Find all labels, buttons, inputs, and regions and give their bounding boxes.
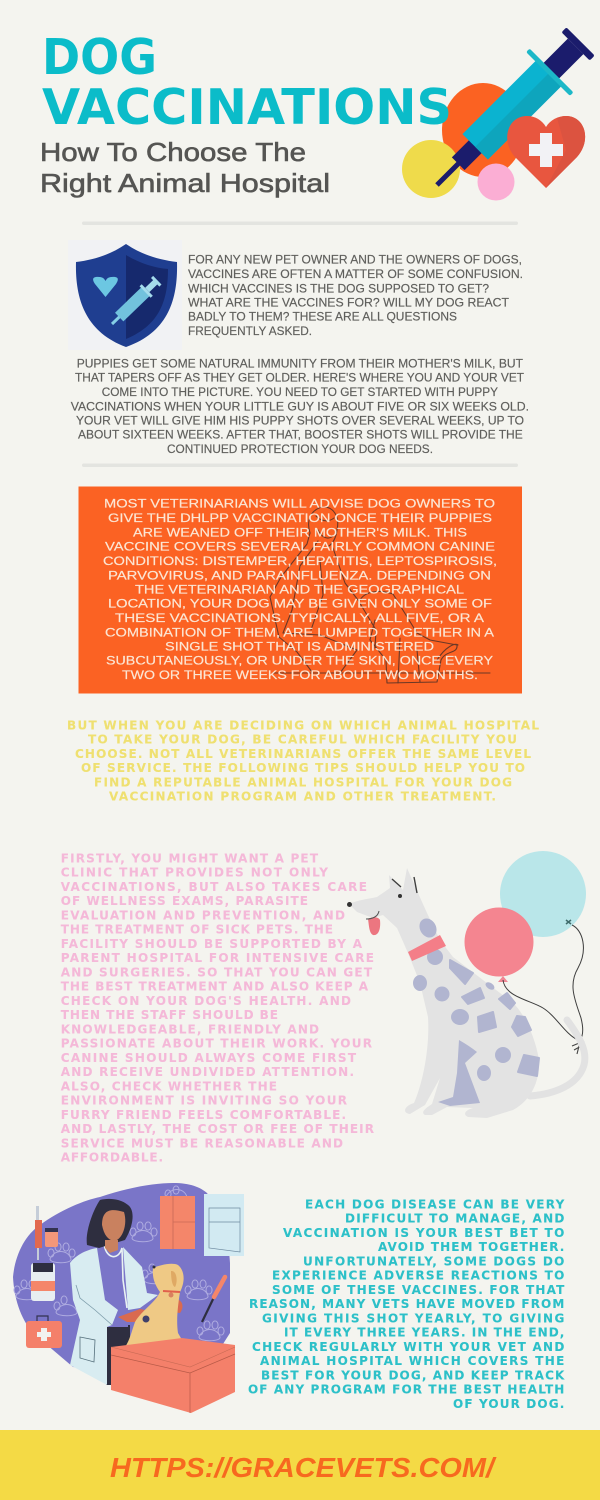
- text block: vaccination advice: SOME OF THESE VACCINES. FOR THAT: [272, 1283, 565, 1297]
- text block: choosing a facility: [67, 718, 539, 804]
- text block: pet clinic tips: ENVIRONMENT IS INVITING SO YOUR: [61, 1094, 347, 1108]
- text block: pet clinic tips: SERVICE MUST BE REASONABLE AND: [61, 1136, 343, 1150]
- vet in white coat: [70, 1199, 182, 1385]
- text block: choosing a facility: FIND A REPUTABLE ANIMAL HOSPITAL FOR YOUR DOG: [94, 775, 512, 789]
- text block: pet clinic tips: AND LASTLY, THE COST OR FEE OF THEIR: [61, 1122, 374, 1136]
- text block: new pet owner questions: WHAT ARE THE VACCINES FOR? WILL MY DOG REACT: [188, 296, 509, 310]
- text block: DHLPP vaccination copy: SINGLE SHOT THAT IS ADMINISTERED: [165, 639, 434, 653]
- text block: DHLPP vaccination copy: LOCATION, YOUR DOG MAY BE GIVEN ONLY SOME OF: [108, 597, 492, 611]
- text block: pet clinic tips: THE TREATMENT OF SICK PETS. THE: [61, 923, 333, 937]
- text block: pet clinic tips: PASSIONATE ABOUT THEIR WORK. YOUR: [61, 1037, 372, 1051]
- text block: DHLPP vaccination copy: VACCINE COVERS SEVERAL FAIRLY COMMON CANINE: [105, 540, 495, 554]
- text block: puppies immunity: ABOUT SIXTEEN WEEKS. AFTER THAT, BOOSTER SHOTS WILL PROVIDE THE: [78, 428, 523, 442]
- text block: DHLPP vaccination copy: MOST VETERINARIANS WILL ADVISE DOG OWNERS TO: [104, 497, 495, 511]
- text block: puppies immunity: PUPPIES GET SOME NATURAL IMMUNITY FROM THEIR MOTHER'S MILK, BUT: [77, 357, 523, 371]
- text block: vaccination advice: VACCINATION IS YOUR BEST BET TO: [283, 1226, 564, 1240]
- title: DOG: [42, 29, 157, 86]
- text block: puppies immunity: [71, 357, 529, 456]
- text block: new pet owner questions: BADLY TO THEM? THESE ARE ALL QUESTIONS: [188, 310, 457, 324]
- text block: DHLPP vaccination copy: THE VETERINARIAN AND THE GEOGRAPHICAL: [135, 582, 464, 596]
- text block: pet clinic tips: AND RECEIVE UNDIVIDED ATTENTION.: [61, 1065, 354, 1079]
- text block: pet clinic tips: THEN THE STAFF SHOULD BE: [61, 1008, 278, 1022]
- text block: vaccination advice: EXPERIENCE ADVERSE REACTIONS TO: [272, 1269, 564, 1283]
- text block: pet clinic tips: THE BEST TREATMENT AND ALSO KEEP A: [61, 980, 369, 994]
- illustration: vet examining a puppy: [13, 1183, 244, 1413]
- text block: vaccination advice: REASON, MANY VETS HAVE MOVED FROM: [249, 1297, 564, 1311]
- illustration: exam table: [111, 1338, 235, 1413]
- text block: pet clinic tips: [61, 851, 374, 1165]
- text block: choosing a facility: TO TAKE YOUR DOG, BE CAREFUL WHICH FACILITY YOU: [88, 733, 517, 747]
- text block: vaccination advice: IT EVERY THREE YEARS. IN THE END,: [284, 1326, 564, 1340]
- text block: pet clinic tips: CHECK ON YOUR DOG'S HEALTH. AND: [61, 994, 351, 1008]
- line art: person with dog: [270, 507, 490, 683]
- text block: DHLPP vaccination copy: CONDITIONS: DISTEMPER, HEPATITIS, LEPTOSPIROSIS,: [103, 554, 497, 568]
- text block: choosing a facility: OF SERVICE. THE FOLLOWING TIPS SHOULD HELP YOU TO: [81, 761, 525, 775]
- illustration: syringe with shapes and heart: [402, 20, 600, 207]
- text block: DHLPP vaccination copy: ARE WEANED OFF THEIR MOTHER'S MILK. THIS: [133, 525, 467, 539]
- text block: new pet owner questions: WHICH VACCINES IS THE DOG SUPPOSED TO GET?: [188, 281, 489, 295]
- text block: DHLPP vaccination copy: COMBINATION OF THEM, ARE LUMPED TOGETHER IN A: [105, 625, 495, 639]
- text block: puppies immunity: COME INTO THE PICTURE. YOU NEED TO GET STARTED WITH PUPPY: [102, 385, 498, 399]
- text block: vaccination advice: AVOID THEM TOGETHER.: [378, 1240, 564, 1254]
- text block: puppies immunity: THAT TAPERS OFF AS THEY GET OLDER. HERE'S WHERE YOU AND YOUR VET: [75, 371, 524, 385]
- text block: vaccination advice: DIFFICULT TO MANAGE, AND: [345, 1212, 564, 1226]
- text block: choosing a facility: VACCINATION PROGRAM AND OTHER TREATMENT.: [109, 790, 496, 804]
- text block: pet clinic tips: FIRSTLY, YOU MIGHT WANT A PET: [61, 851, 319, 865]
- panel: DHLPP vaccination: [78, 486, 522, 694]
- subtitle: Right Animal Hospital: [40, 168, 330, 198]
- text block: vaccination advice: GIVING THIS SHOT YEARLY, TO GIVING: [262, 1311, 564, 1325]
- text block: pet clinic tips: AFFORDABLE.: [61, 1151, 163, 1165]
- text block: DHLPP vaccination copy: GIVE THE DHLPP VACCINATION ONCE THEIR PUPPIES: [108, 511, 492, 525]
- text block: vaccination advice: CHECK REGULARLY WITH YOUR VET AND: [252, 1340, 564, 1354]
- subtitle: How To Choose The: [40, 137, 306, 167]
- text block: pet clinic tips: EVALUATION AND PREVENTION, AND: [61, 908, 345, 922]
- icon: window on wall: [160, 1196, 195, 1249]
- text block: pet clinic tips: CANINE SHOULD ALWAYS COME FIRST: [61, 1051, 357, 1065]
- title: VACCINATIONS: [42, 79, 452, 136]
- title: [42, 29, 452, 136]
- text block: vaccination advice: OF YOUR DOG.: [453, 1397, 564, 1411]
- subtitle: [40, 137, 330, 198]
- text block: DHLPP vaccination copy: [103, 497, 497, 682]
- text block: new pet owner questions: [188, 253, 523, 338]
- text block: new pet owner questions: VACCINES ARE OFTEN A MATTER OF SOME CONFUSION.: [188, 267, 523, 281]
- text block: vaccination advice: EACH DOG DISEASE CAN BE VERY: [305, 1197, 565, 1211]
- icon: shield with heart and syringe: [68, 240, 182, 350]
- text block: DHLPP vaccination copy: TWO OR THREE WEEKS FOR ABOUT TWO MONTHS.: [122, 668, 478, 682]
- text block: puppies immunity: YOUR VET WILL GIVE HIM HIS PUPPY SHOTS OVER SEVERAL WEEKS, UP TO: [76, 413, 524, 427]
- text block: vaccination advice: OF ANY PROGRAM FOR THE BEST HEALTH: [248, 1383, 564, 1397]
- text block: vaccination advice: UNFORTUNATELY, SOME DOGS DO: [303, 1254, 564, 1268]
- footer banner: [0, 1430, 600, 1500]
- text block: DHLPP vaccination copy: PARVOVIRUS, AND PARAINFLUENZA. DEPENDING ON: [108, 568, 491, 582]
- text block: vaccination advice: [248, 1197, 565, 1411]
- illustration: spotted dog with balloons: [347, 851, 586, 1118]
- text block: choosing a facility: BUT WHEN YOU ARE DECIDING ON WHICH ANIMAL HOSPITAL: [67, 718, 539, 732]
- text block: DHLPP vaccination copy: SUBCUTANEOUSLY, OR UNDER THE SKIN, ONCE EVERY: [106, 654, 493, 668]
- text block: pet clinic tips: AND SURGERIES. SO THAT YOU CAN GET: [61, 965, 373, 979]
- text block: pet clinic tips: OF WELLNESS EXAMS, PARASITE: [61, 894, 308, 908]
- text block: new pet owner questions: FOR ANY NEW PET OWNER AND THE OWNERS OF DOGS,: [188, 253, 522, 267]
- text block: DHLPP vaccination copy: THESE VACCINATIONS. TYPICALLY, ALL FIVE, OR A: [115, 611, 485, 625]
- text block: pet clinic tips: PARENT HOSPITAL FOR INTENSIVE CARE: [61, 951, 374, 965]
- text block: pet clinic tips: VACCINATIONS, BUT ALSO TAKES CARE: [61, 880, 367, 894]
- text block: choosing a facility: CHOOSE. NOT ALL VETERINARIANS OFFER THE SAME LEVEL: [75, 747, 531, 761]
- text block: vaccination advice: ANIMAL HOSPITAL WHICH COVERS THE: [260, 1354, 564, 1368]
- text block: puppies immunity: CONTINUED PROTECTION YOUR DOG NEEDS.: [167, 442, 433, 456]
- text block: pet clinic tips: KNOWLEDGEABLE, FRIENDLY AND: [61, 1022, 319, 1036]
- text block: vaccination advice: BEST FOR YOUR DOG, AND KEEP TRACK: [261, 1368, 565, 1382]
- text block: pet clinic tips: FURRY FRIEND FEELS COMFORTABLE.: [61, 1108, 346, 1122]
- text block: pet clinic tips: FACILITY SHOULD BE SUPPORTED BY A: [61, 937, 363, 951]
- text block: pet clinic tips: ALSO, CHECK WHETHER THE: [61, 1079, 277, 1093]
- text block: puppies immunity: VACCINATIONS WHEN YOUR LITTLE GUY IS ABOUT FIVE OR SIX WEEKS OLD.: [71, 399, 529, 413]
- footer URL: HTTPS://GRACEVETS.COM/: [110, 1452, 497, 1483]
- illustration: puppy: [125, 1264, 185, 1350]
- text block: new pet owner questions: FREQUENTLY ASKED.: [188, 324, 312, 338]
- background paw prints: [14, 1186, 224, 1341]
- text block: pet clinic tips: CLINIC THAT PROVIDES NOT ONLY: [61, 866, 328, 880]
